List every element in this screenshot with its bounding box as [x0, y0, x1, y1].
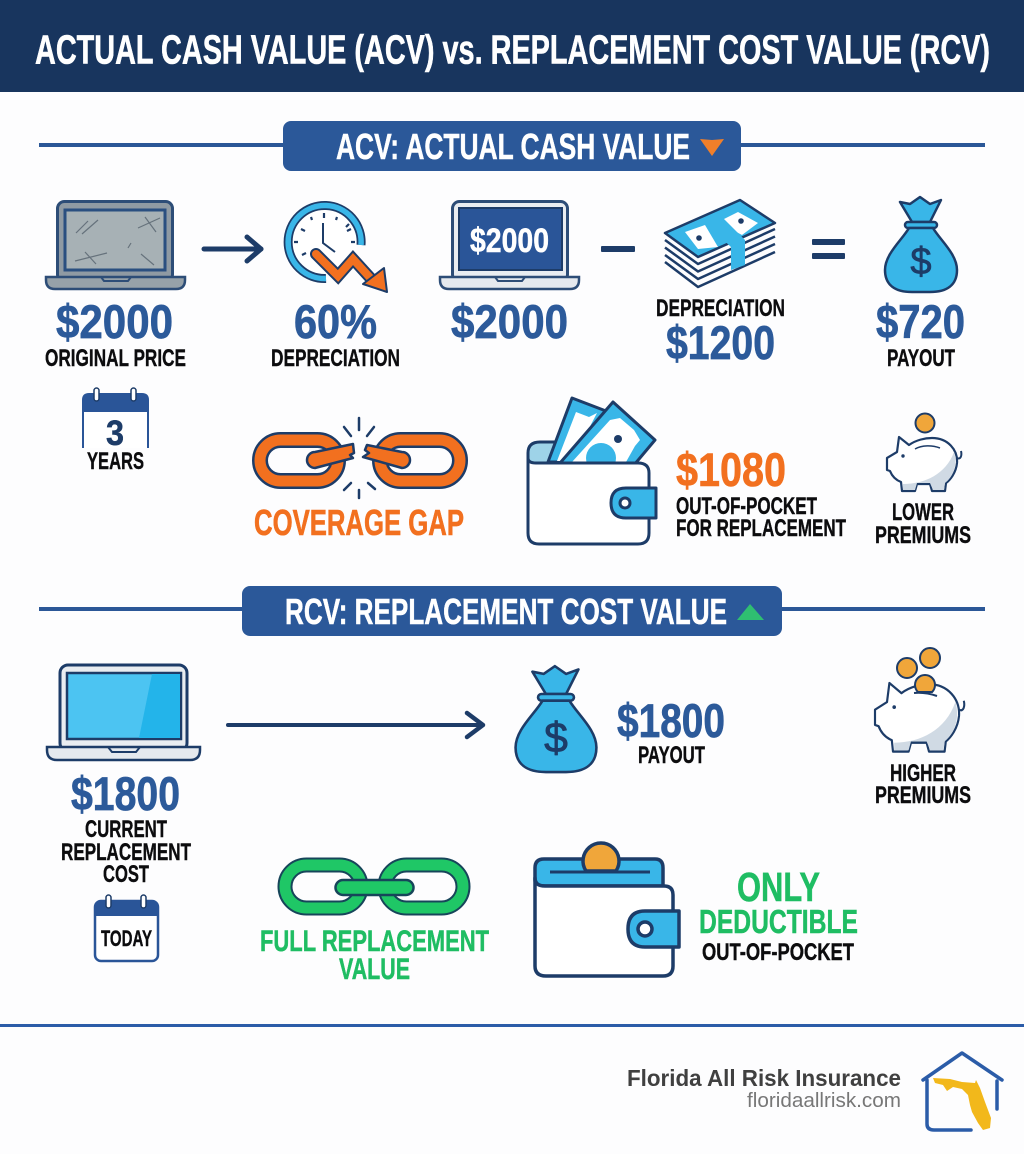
- icon: money bag RCV: $: [544, 715, 568, 762]
- footer company name: [627, 1065, 901, 1112]
- label: lower premiums: LOWER: [892, 499, 954, 526]
- stat: original price: $2000: [56, 295, 173, 348]
- icon: money bag RCV: [516, 666, 596, 772]
- stat: original price: ORIGINAL PRICE: [45, 345, 186, 372]
- stat: $1080 out of pocket: [676, 443, 846, 542]
- label: lower premiums: PREMIUMS: [875, 522, 971, 549]
- stat: current replacement cost: REPLACEMENT: [61, 839, 191, 866]
- icon: laptop with price: [440, 202, 579, 289]
- stat: 60% depreciation: 60%: [294, 295, 377, 348]
- stat: value $2000: $2000: [451, 295, 568, 348]
- label: coverage gap: COVERAGE GAP: [254, 502, 464, 543]
- stat: original price: [45, 295, 186, 372]
- icon: money bag ACV: [885, 197, 957, 292]
- icon: clock with falling arrow: [288, 206, 387, 292]
- stat: payout $720: $720: [876, 295, 965, 348]
- minus sign: [601, 246, 635, 252]
- stat: payout $1800: PAYOUT: [638, 742, 705, 769]
- stat: $1080 out of pocket: $1080: [676, 443, 786, 496]
- long arrow: [228, 713, 483, 737]
- icon: money bag ACV: $: [910, 241, 932, 283]
- icon: stack of cash: [665, 200, 775, 287]
- icon: calendar 3 years: [83, 388, 148, 475]
- icon: calendar 3 years: YEARS: [87, 448, 144, 475]
- label: full replacement value: FULL REPLACEMENT: [260, 925, 489, 958]
- icon: broken chain: [260, 418, 460, 498]
- icon: down triangle: [700, 139, 724, 156]
- icon: wallet with cash: [528, 398, 656, 544]
- icon: intact chain: [285, 865, 463, 908]
- stat: 60% depreciation: [271, 295, 400, 372]
- label: higher premiums: [875, 760, 971, 809]
- stat: current replacement cost: CURRENT: [85, 816, 167, 843]
- icon: new laptop: [47, 665, 200, 760]
- icon: calendar today: TODAY: [101, 926, 152, 951]
- stat: depreciation $1200: $1200: [666, 316, 775, 369]
- stat: payout $720: [876, 295, 965, 372]
- section heading: RCV: RCV: REPLACEMENT COST VALUE: [285, 591, 727, 632]
- equals sign: [812, 239, 845, 259]
- icon: small piggy bank with coin: [887, 414, 961, 491]
- icon: calendar today: [95, 895, 158, 961]
- section heading: RCV: [39, 586, 985, 636]
- text: only deductible out of pocket: ONLY: [737, 864, 820, 910]
- stat: payout $1800: [617, 694, 725, 769]
- stat: depreciation $1200: DEPRECIATION: [656, 295, 785, 322]
- footer rule: [0, 1024, 1024, 1027]
- stat: current replacement cost: [61, 767, 191, 888]
- label: full replacement value: [260, 925, 489, 986]
- stat: $1080 out of pocket: FOR REPLACEMENT: [676, 515, 846, 542]
- stat: $1080 out of pocket: OUT-OF-POCKET: [676, 493, 817, 520]
- icon: large piggy bank with coins: [875, 648, 964, 752]
- icon: calendar 3 years: 3: [106, 414, 124, 453]
- label: lower premiums: [875, 499, 971, 549]
- section heading: ACV: [39, 121, 985, 171]
- stat: payout $1800: $1800: [617, 694, 725, 747]
- logo: house with Florida: [923, 1053, 1002, 1130]
- icon: wallet with coin: [535, 843, 679, 976]
- label: full replacement value: VALUE: [339, 953, 410, 986]
- stat: depreciation $1200: [656, 295, 785, 369]
- text: only deductible out of pocket: [699, 864, 858, 966]
- text: only deductible out of pocket: OUT-OF-POCKET: [702, 939, 854, 966]
- label: higher premiums: HIGHER: [890, 760, 956, 787]
- label: higher premiums: PREMIUMS: [875, 782, 971, 809]
- text: only deductible out of pocket: DEDUCTIBLE: [699, 903, 858, 940]
- stat: 60% depreciation: DEPRECIATION: [271, 345, 400, 372]
- arrow: [204, 237, 261, 261]
- icon: worn laptop: [46, 202, 185, 289]
- header bar with title: [0, 0, 1024, 92]
- footer company name: floridaallrisk.com: [747, 1090, 901, 1112]
- stat: current replacement cost: $1800: [71, 767, 180, 820]
- stat: payout $720: PAYOUT: [887, 345, 955, 372]
- stat: current replacement cost: COST: [103, 861, 149, 888]
- icon: laptop with price: $2000: [470, 222, 549, 260]
- icon: up triangle: [737, 604, 764, 620]
- footer company name: Florida All Risk Insurance: [627, 1065, 901, 1091]
- section heading: ACV: ACV: ACTUAL CASH VALUE: [336, 126, 690, 167]
